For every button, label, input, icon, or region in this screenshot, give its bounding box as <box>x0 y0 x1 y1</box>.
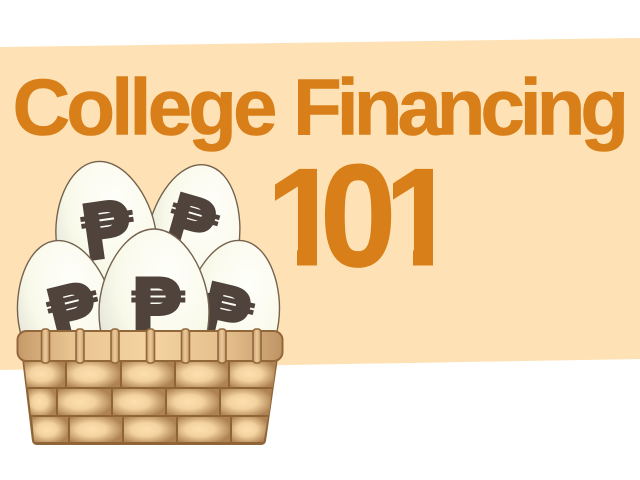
background band <box>0 38 640 370</box>
egg: front centre <box>99 229 209 386</box>
title number: 101: 0 <box>320 135 396 298</box>
title number: 101: 1 <box>266 140 343 295</box>
title: College Financing: Financing <box>293 62 624 152</box>
title: College Financing: College <box>12 62 275 152</box>
illustration: basket of peso eggs <box>7 155 289 445</box>
egg: front right: ₱ <box>190 265 261 363</box>
egg: front centre: ₱ <box>129 262 185 355</box>
rim straps <box>42 329 261 363</box>
title: College Financing <box>12 62 624 152</box>
basket body <box>22 358 278 445</box>
egg: back left: ₱ <box>74 183 141 280</box>
egg: back right <box>136 157 251 317</box>
basket rim <box>18 329 282 363</box>
egg: back right: ₱ <box>156 177 228 271</box>
egg: front right <box>175 234 289 394</box>
title number: 101 <box>275 164 433 268</box>
title number: 101: 1 <box>382 140 459 295</box>
egg: front left <box>7 233 125 395</box>
egg: front left: ₱ <box>37 263 110 362</box>
basket weave bricks <box>24 361 276 442</box>
egg: back left <box>46 155 166 314</box>
